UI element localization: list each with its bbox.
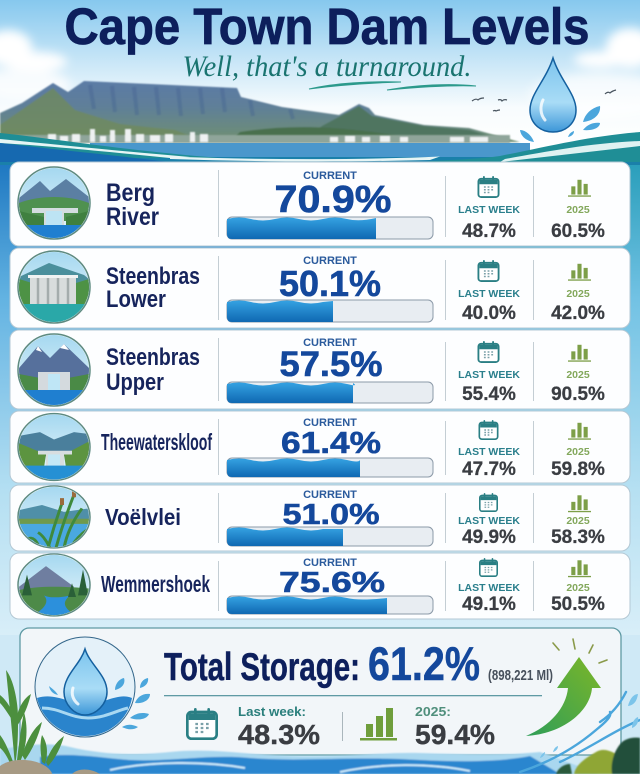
last week bbox=[458, 177, 520, 242]
2025: 2025 bbox=[566, 369, 590, 381]
2025: 42.0% bbox=[551, 303, 605, 324]
last week: LAST WEEK bbox=[458, 369, 520, 381]
panel: Berg River bbox=[10, 162, 630, 246]
panel: Theewaterskloof bbox=[10, 411, 630, 483]
dam name bbox=[106, 263, 200, 313]
total storage heading bbox=[164, 637, 553, 690]
current level bbox=[282, 489, 380, 531]
current level: 75.6% bbox=[279, 567, 385, 599]
bottom water waves bbox=[0, 744, 600, 774]
2025: 59.8% bbox=[551, 459, 605, 480]
current level: 51.0% bbox=[282, 499, 380, 531]
current level: 61.4% bbox=[281, 425, 381, 460]
last week: LAST WEEK bbox=[458, 582, 520, 594]
last week bbox=[458, 421, 520, 480]
total storage heading: 61.2% bbox=[368, 637, 480, 690]
current level: 50.1% bbox=[279, 263, 381, 304]
progress bar bbox=[227, 458, 433, 477]
last week total bbox=[187, 704, 320, 750]
2025: 2025 bbox=[566, 288, 590, 300]
current level bbox=[279, 557, 385, 599]
dam name: Theewaterskloof bbox=[101, 429, 212, 455]
progress bar bbox=[227, 382, 433, 403]
dam name: Steenbras bbox=[106, 263, 200, 290]
2025 total: 59.4% bbox=[415, 719, 495, 750]
dam name: Voëlvlei bbox=[105, 504, 181, 530]
current level: CURRENT bbox=[303, 417, 357, 429]
2025: 90.5% bbox=[551, 384, 605, 405]
2025 bbox=[551, 180, 605, 242]
2025: 58.3% bbox=[551, 527, 605, 548]
icon: green up arrow bbox=[526, 639, 607, 736]
subtitle underline swoosh bbox=[309, 82, 476, 90]
dam name: Wemmershoek bbox=[101, 571, 210, 597]
last week: 55.4% bbox=[462, 384, 516, 405]
progress bar bbox=[227, 596, 433, 614]
last week: LAST WEEK bbox=[458, 446, 520, 458]
dam name: Upper bbox=[106, 369, 164, 396]
last week total: Last week: bbox=[238, 704, 306, 719]
panel: total storage bbox=[20, 628, 621, 755]
subtitle: Well, that's a turnaround. bbox=[182, 50, 472, 83]
panel: Steenbras Lower bbox=[10, 248, 630, 328]
last week total: 48.3% bbox=[238, 719, 320, 750]
dam name: Lower bbox=[106, 286, 166, 313]
dam name bbox=[106, 344, 200, 396]
panel: Voelvlei bbox=[10, 485, 630, 551]
icon: Voelvlei reeds bbox=[18, 486, 90, 548]
2025 bbox=[551, 423, 605, 480]
last week: 47.7% bbox=[462, 459, 516, 480]
2025: 50.5% bbox=[551, 594, 605, 615]
total storage heading: Total Storage: bbox=[164, 646, 360, 689]
current level: CURRENT bbox=[303, 337, 357, 349]
total storage heading: (898,221 Ml) bbox=[488, 667, 553, 684]
current level: CURRENT bbox=[303, 489, 357, 501]
last week bbox=[458, 342, 520, 405]
birds bbox=[472, 90, 616, 111]
current level: 70.9% bbox=[274, 179, 392, 221]
icon: water drop with splashes bbox=[520, 58, 600, 142]
dam name: Berg bbox=[106, 179, 155, 207]
last week: LAST WEEK bbox=[458, 204, 520, 216]
2025: 2025 bbox=[566, 446, 590, 458]
progress bar bbox=[227, 527, 433, 546]
icon: total storage water drop bbox=[35, 637, 150, 737]
2025: 60.5% bbox=[551, 221, 605, 242]
mountains: Table Mountain bbox=[0, 81, 520, 142]
progress bar bbox=[227, 300, 433, 322]
bay water and teal waves bbox=[0, 132, 640, 165]
last week: 40.0% bbox=[462, 303, 516, 324]
last week bbox=[458, 261, 520, 324]
right splash bbox=[520, 692, 640, 772]
icon: Wemmershoek landscape bbox=[18, 554, 90, 616]
2025 bbox=[551, 495, 605, 548]
dam name: Steenbras bbox=[106, 344, 200, 371]
2025: 2025 bbox=[566, 515, 590, 527]
2025 bbox=[551, 560, 605, 615]
plants and rocks bottom left bbox=[0, 670, 100, 774]
panel: Steenbras Upper bbox=[10, 330, 630, 409]
current level: CURRENT bbox=[303, 170, 357, 182]
current level: CURRENT bbox=[303, 557, 357, 569]
last week: 48.7% bbox=[462, 221, 516, 242]
last week: LAST WEEK bbox=[458, 515, 520, 527]
last week: LAST WEEK bbox=[458, 288, 520, 300]
2025: 2025 bbox=[566, 204, 590, 216]
2025 bbox=[551, 345, 605, 405]
last week bbox=[458, 494, 520, 548]
icon: Steenbras Upper dam bbox=[18, 334, 90, 406]
last week: 49.1% bbox=[462, 594, 516, 615]
icon: Steenbras Lower dam bbox=[18, 251, 90, 324]
2025: 2025 bbox=[566, 582, 590, 594]
current level: 57.5% bbox=[280, 345, 382, 384]
panel: Wemmershoek bbox=[10, 553, 630, 619]
2025 total bbox=[360, 704, 495, 750]
bushes bottom right bbox=[556, 738, 640, 774]
icon: Theewaterskloof dam bbox=[18, 414, 90, 480]
header scene: sky and clouds bbox=[0, 0, 640, 150]
progress bar bbox=[227, 217, 433, 239]
last week: 49.9% bbox=[462, 527, 516, 548]
icon: Berg River dam bbox=[18, 167, 90, 239]
dam name: River bbox=[106, 203, 159, 231]
2025 total: 2025: bbox=[415, 704, 451, 719]
dam name bbox=[106, 179, 159, 231]
last week bbox=[458, 559, 520, 615]
2025 bbox=[551, 264, 605, 324]
current level: CURRENT bbox=[303, 255, 357, 267]
city skyline bbox=[10, 129, 510, 143]
